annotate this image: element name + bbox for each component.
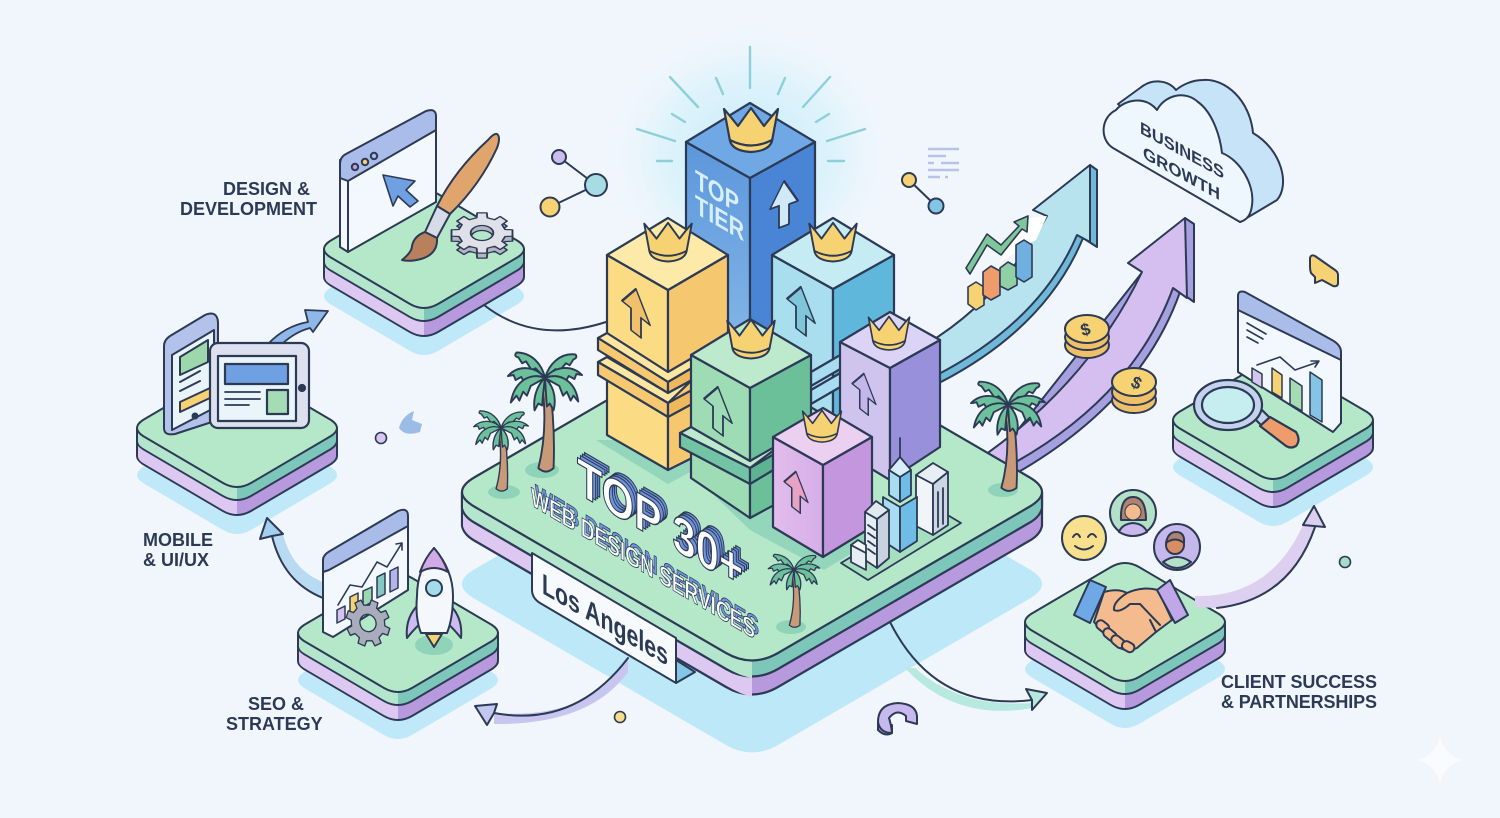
Los Angeles banner: Los Angeles (542, 567, 668, 673)
icon: rocket (407, 548, 461, 655)
icon: tablet (210, 343, 309, 428)
tower: yellow (598, 218, 728, 470)
main platform (462, 324, 1042, 697)
glow behind top tier tower (600, 20, 900, 290)
icon: man avatar (1154, 524, 1200, 570)
bar chart on arrow (966, 216, 1047, 310)
arrow on green tower (704, 379, 732, 441)
light rays around top tier (637, 47, 865, 161)
cloud: business growth: BUSINESS (1140, 117, 1224, 183)
tower ground shadows (596, 440, 880, 570)
heading: Web Design Services: WEB DESIGN SERVICES (535, 478, 759, 642)
coin stack 2 (1112, 368, 1156, 413)
tower: cyan (772, 218, 894, 420)
network nodes right (902, 173, 944, 214)
purple ring shape (878, 703, 917, 734)
coin stack 1: $ (1079, 319, 1093, 340)
cloud: business growth (1104, 80, 1283, 222)
platform: mobile and ui ux (137, 369, 337, 515)
tower: top tier blue (686, 103, 815, 360)
crown on pink tower (803, 410, 841, 442)
platform: seo and strategy (298, 574, 498, 720)
tower: violet (840, 312, 940, 480)
shadows under platforms (137, 237, 1373, 752)
platform: design and development (324, 190, 524, 336)
purple growth arrow (985, 218, 1194, 478)
label: design and development: DEVELOPMENT (180, 199, 317, 219)
palm tree small (474, 411, 528, 491)
sparkle watermark (1416, 736, 1464, 784)
top tier text: TIER (695, 188, 744, 248)
network nodes left (540, 150, 607, 216)
label: seo and strategy: SEO & (248, 694, 304, 714)
icon: paint brush (402, 134, 499, 261)
heading: Top 30+: TOP 30+ (584, 441, 750, 596)
cloud: business growth: GROWTH (1143, 142, 1220, 204)
crown on green tower (727, 320, 775, 358)
blue blob (399, 411, 422, 434)
crown on blue tower (724, 108, 778, 152)
arrow on cyan tower (787, 279, 815, 341)
label: client success and partnerships: CLIENT SUCCESS (1221, 672, 1377, 692)
tower: pink (773, 408, 872, 557)
tower: green (680, 319, 811, 518)
arrow: seo to mobile (260, 518, 323, 598)
Los Angeles banner (532, 553, 695, 683)
label: mobile and ui ux: MOBILE (143, 530, 213, 550)
icon: gear (452, 213, 512, 258)
platform: analytics (1173, 361, 1373, 507)
coin stack 2: $ (1128, 372, 1145, 394)
cyan growth arrow (925, 165, 1097, 385)
crown on yellow tower (644, 223, 692, 261)
platform: client success (1025, 563, 1225, 709)
label: design and development (180, 179, 317, 219)
heading: Top 30+: TOP 30+ (580, 444, 746, 599)
icon: browser window (340, 110, 436, 252)
decorative small dots (376, 432, 1350, 722)
label: client success and partnerships: & PARTNERSHIPS (1221, 692, 1377, 712)
arrow: client to analytics (1195, 506, 1325, 608)
label: seo and strategy (226, 694, 323, 734)
heading: Web Design Services: WEB DESIGN SERVICES (531, 481, 755, 645)
arrow on violet tower (852, 367, 876, 420)
label: mobile and ui ux (143, 530, 213, 570)
icon: chat bubble (1310, 255, 1338, 286)
icon: smiley face (1062, 516, 1106, 560)
icon: seo gear (339, 593, 397, 653)
top tier text: TOP (695, 163, 739, 220)
heading: Top 30+: TOP 30+ (582, 443, 748, 597)
palm tree right (971, 382, 1045, 491)
icon: analytics window (323, 510, 408, 637)
icon: handshake (1074, 580, 1188, 654)
arrow on blue tower (770, 173, 798, 235)
palm tree shadows (488, 462, 1018, 634)
heading: Web Design Services (531, 478, 759, 645)
icon: phone (164, 314, 218, 434)
arrow: banner to seo (475, 658, 628, 725)
arrow on pink tower (784, 465, 808, 518)
crown on cyan tower (809, 223, 857, 261)
text lines icon (928, 149, 959, 177)
label: mobile and ui ux: & UI/UX (143, 550, 209, 570)
heading: Top 30+: TOP 30+ (577, 446, 743, 601)
icon: magnifying glass (1194, 380, 1298, 448)
label: client success and partnerships (1221, 672, 1377, 712)
connector: platform to design (484, 305, 606, 330)
palm tree large (508, 353, 582, 472)
crown on violet tower (868, 317, 910, 350)
icon: woman avatar (1110, 490, 1156, 536)
coin stack 1 (1065, 315, 1109, 358)
city skyline (841, 438, 961, 580)
arrow on yellow tower (622, 281, 650, 343)
palm tree front (768, 554, 820, 627)
label: design and development: DESIGN & (223, 179, 310, 199)
icon: analytics browser (1238, 292, 1341, 432)
label: seo and strategy: STRATEGY (226, 714, 323, 734)
arrow: mobile to design (268, 310, 328, 344)
arrow: platform to client (890, 622, 1047, 711)
